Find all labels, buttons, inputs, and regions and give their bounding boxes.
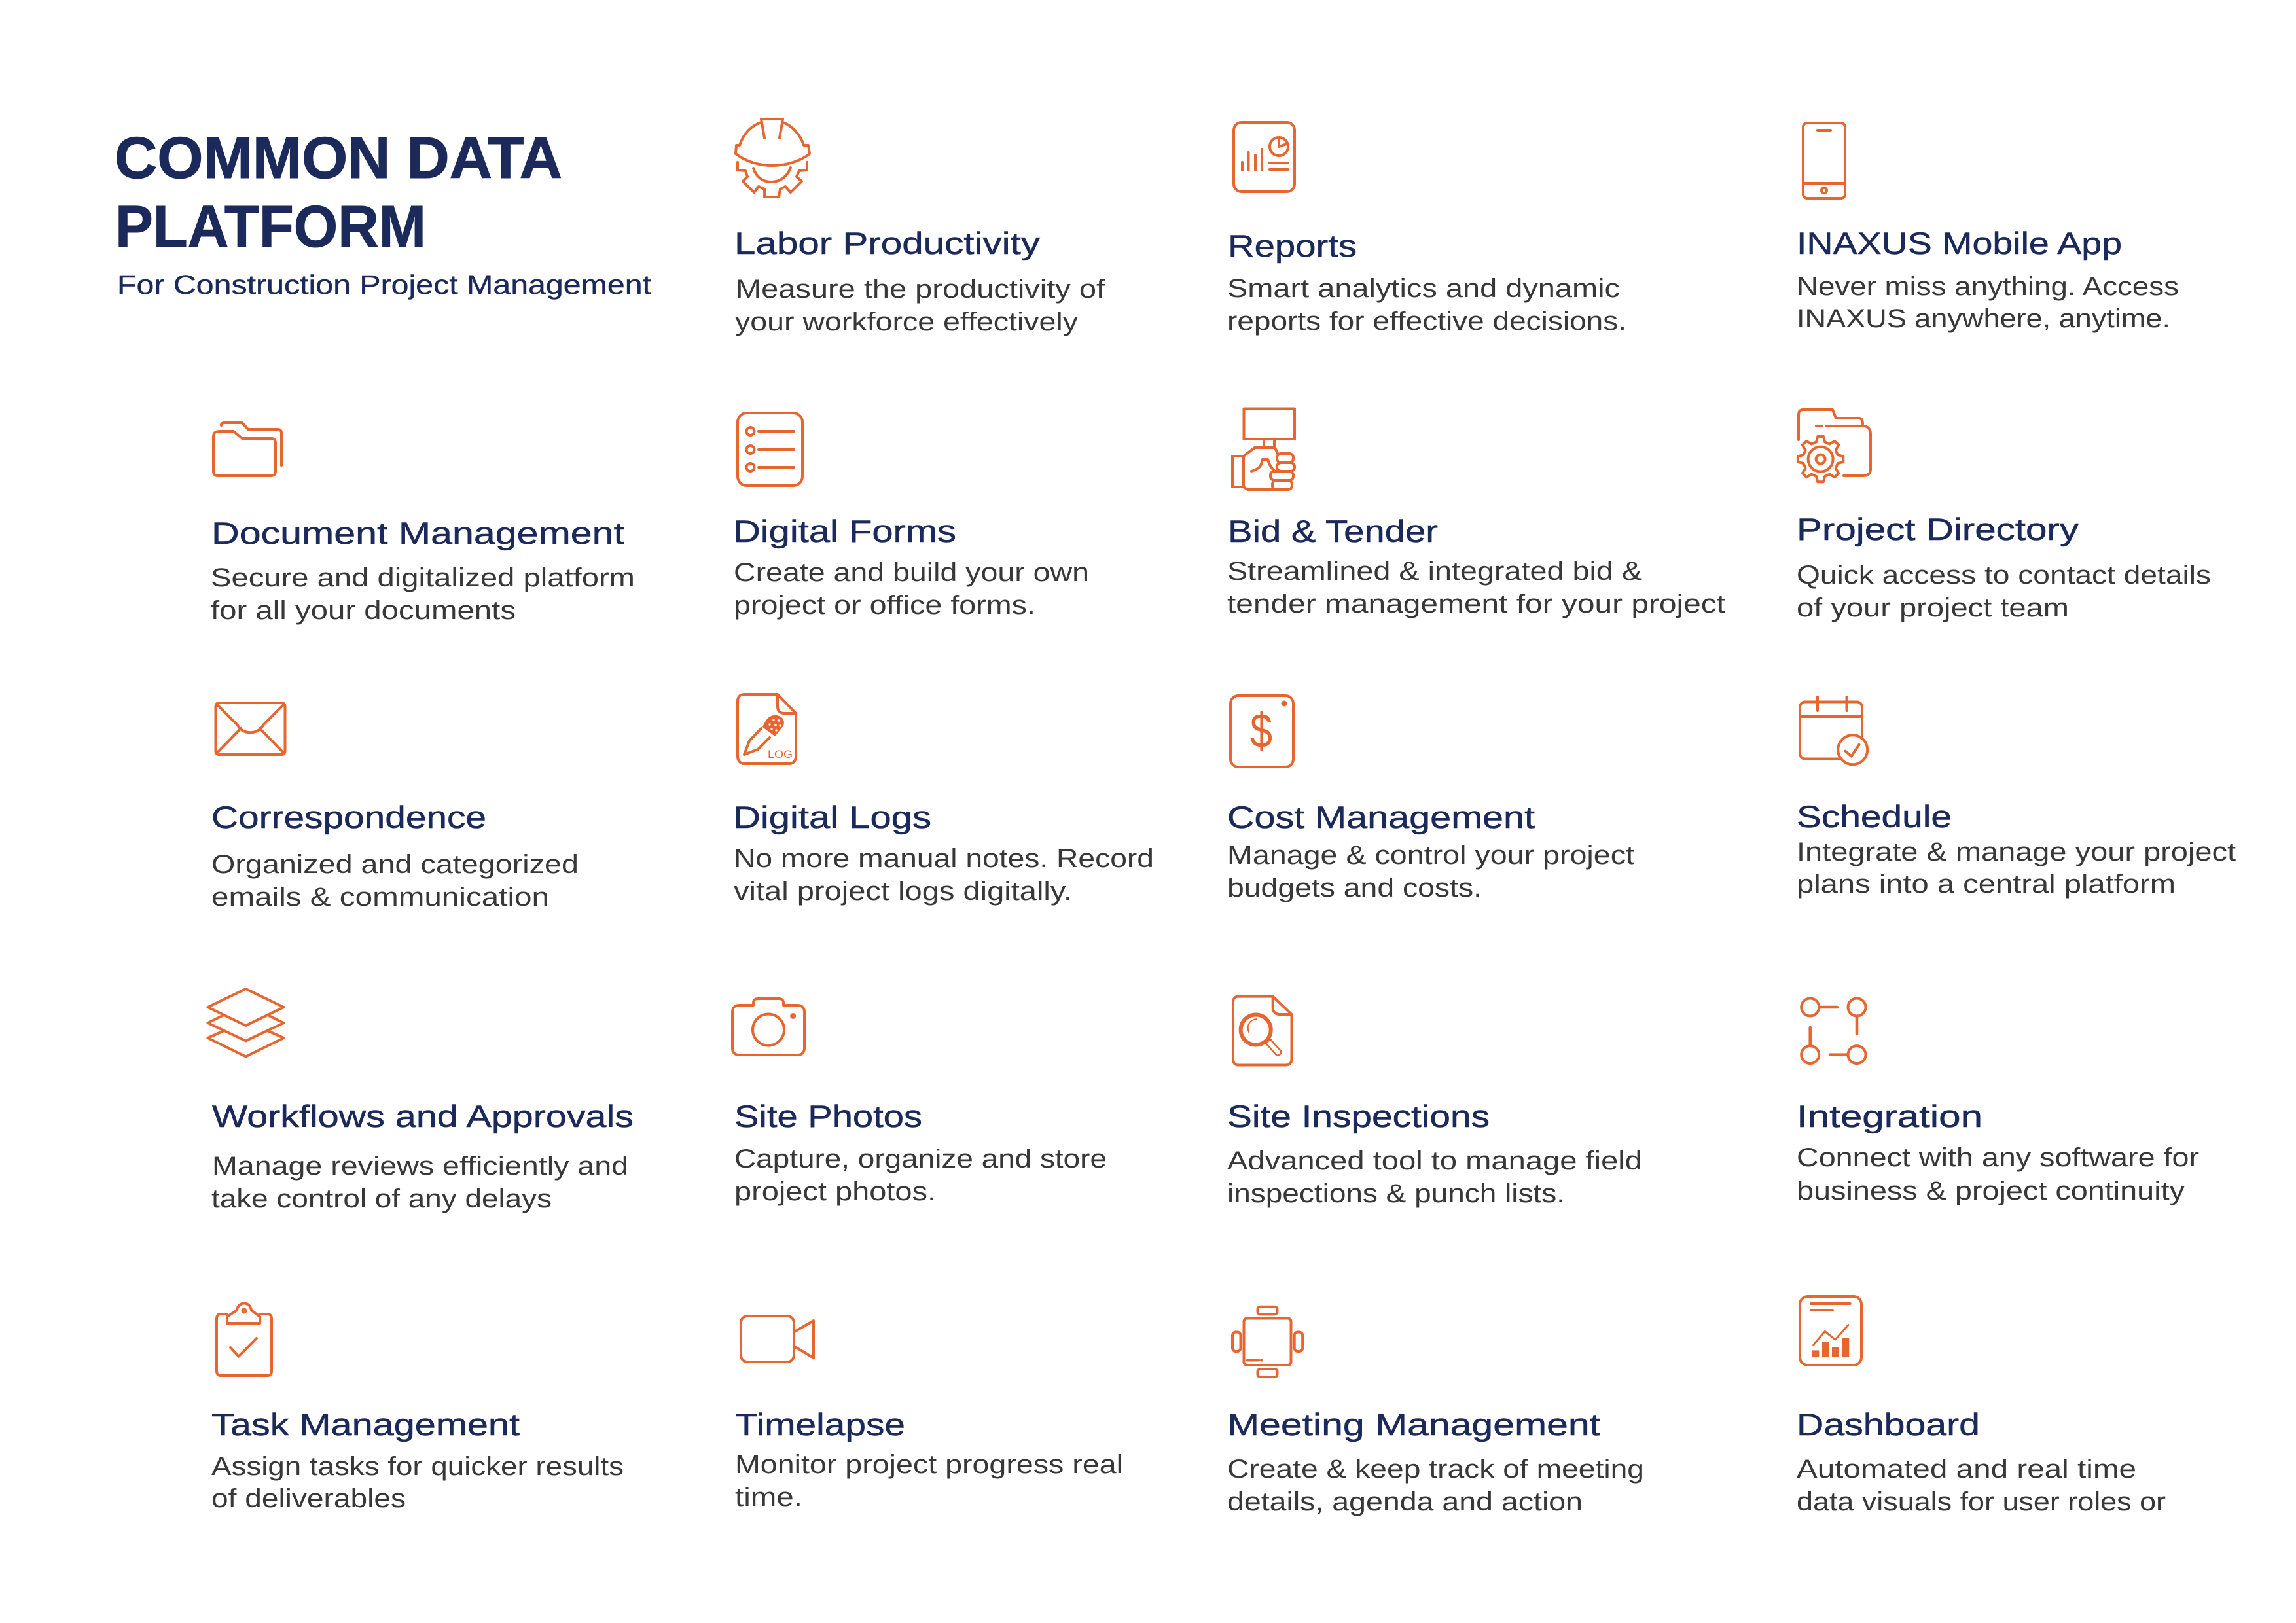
icon: envelope: [216, 703, 285, 755]
panel: reports: [1227, 122, 1626, 336]
panel: timelapse: [735, 1316, 1123, 1512]
panel: digital logs: [733, 694, 1154, 906]
icon: camera: [732, 999, 804, 1055]
description: Advanced tool to manage field: [1227, 1147, 1642, 1175]
description: [1797, 272, 2179, 333]
description: [1797, 1455, 2166, 1516]
description: Integrate & manage your project: [1797, 838, 2236, 866]
description: Connect with any software for: [1797, 1143, 2199, 1172]
icon: mobile phone: [1803, 123, 1845, 198]
description: [211, 563, 635, 625]
description: [734, 1145, 1107, 1206]
icon: form list: [738, 413, 802, 486]
panel: workflows and approvals: [208, 989, 634, 1213]
description: project or office forms.: [734, 591, 1035, 620]
icon: report card: [1234, 122, 1295, 192]
icon: hand holding sign: [1232, 408, 1295, 490]
panel: meeting management: [1227, 1307, 1644, 1516]
description: Never miss anything. Access: [1797, 272, 2179, 301]
description: reports for effective decisions.: [1227, 307, 1626, 336]
heading: Site Photos: [734, 1099, 922, 1133]
heading: Schedule: [1797, 799, 1952, 834]
description: tender management for your project: [1227, 590, 1725, 618]
heading: Workflows and Approvals: [212, 1099, 634, 1133]
description: Smart analytics and dynamic: [1227, 274, 1620, 303]
panel: bid and tender: [1227, 408, 1725, 618]
icon: dashboard chart: [1800, 1296, 1861, 1365]
panel: labor productivity: [734, 119, 1105, 336]
icon: video camera: [741, 1316, 814, 1362]
description: [1797, 838, 2236, 899]
description: time.: [735, 1483, 802, 1512]
icon: dollar card: $: [1250, 704, 1272, 758]
description: Assign tasks for quicker results: [211, 1452, 624, 1481]
heading: Task Management: [211, 1407, 520, 1442]
description: project photos.: [734, 1177, 936, 1206]
description: [1227, 274, 1626, 336]
heading: Site Inspections: [1227, 1099, 1490, 1133]
heading: Digital Forms: [733, 514, 956, 548]
description: [734, 844, 1154, 906]
description: [735, 1450, 1123, 1512]
icon: helmet and gear: [736, 119, 810, 197]
heading: Correspondence: [211, 800, 486, 834]
description: [1797, 1143, 2199, 1205]
description: Automated and real time: [1797, 1455, 2136, 1484]
description: Create & keep track of meeting: [1227, 1455, 1644, 1484]
heading: Dashboard: [1797, 1407, 1980, 1442]
description: [735, 275, 1105, 336]
description: your workforce effectively: [735, 308, 1078, 336]
icon: stacked layers: [208, 989, 284, 1056]
description: Manage & control your project: [1227, 841, 1634, 870]
description: Organized and categorized: [211, 850, 579, 879]
panel: document management: [211, 423, 635, 625]
description: Create and build your own: [734, 558, 1089, 587]
heading: Document Management: [211, 516, 624, 550]
panel: task management: [211, 1304, 624, 1513]
panel: schedule: [1797, 697, 2236, 899]
description: [1227, 557, 1725, 618]
header block: [115, 126, 652, 300]
icon: document with magnifier: [1233, 997, 1292, 1065]
description: [734, 558, 1089, 620]
description: Manage reviews efficiently and: [212, 1152, 628, 1181]
description: Quick access to contact details: [1797, 561, 2211, 590]
description: Capture, organize and store: [734, 1145, 1107, 1173]
icon: log document with pen: [738, 694, 796, 764]
description: No more manual notes. Record: [734, 844, 1154, 873]
heading: INAXUS Mobile App: [1797, 226, 2122, 260]
heading: Labor Productivity: [734, 226, 1041, 260]
icon: meeting table: [1232, 1307, 1302, 1377]
heading: Timelapse: [735, 1407, 905, 1442]
description: [211, 1452, 624, 1513]
description: of your project team: [1797, 594, 2069, 622]
icon: calendar with check: [1800, 697, 1867, 764]
description: [1227, 1147, 1642, 1208]
panel: site inspections: [1227, 997, 1642, 1208]
heading: Project Directory: [1797, 512, 2079, 546]
description: data visuals for user roles or: [1797, 1488, 2166, 1516]
description: for all your documents: [211, 596, 516, 625]
panel: integration: [1797, 999, 2199, 1205]
description: [211, 850, 579, 912]
heading: Cost Management: [1227, 800, 1535, 834]
description: [211, 1152, 628, 1213]
panel: project directory: [1797, 410, 2211, 622]
description: Monitor project progress real: [735, 1450, 1123, 1479]
description: take control of any delays: [211, 1185, 552, 1213]
description: [1797, 561, 2211, 622]
description: inspections & punch lists.: [1227, 1179, 1565, 1208]
description: [1227, 1455, 1644, 1516]
icon: dollar card: [1230, 696, 1293, 767]
description: [1227, 841, 1634, 902]
icon: folders: [213, 423, 281, 476]
heading: Reports: [1228, 228, 1357, 263]
panel: inaxus mobile app: [1797, 123, 2179, 333]
panel: site photos: [732, 999, 1107, 1206]
title line 1: COMMON DATA: [115, 126, 562, 191]
icon: connected nodes: [1801, 999, 1865, 1063]
description: Measure the productivity of: [736, 275, 1105, 304]
panel: correspondence: [211, 703, 579, 912]
description: emails & communication: [211, 883, 549, 912]
panel: digital forms: [733, 413, 1089, 620]
heading: Integration: [1797, 1099, 1982, 1133]
heading: Bid & Tender: [1228, 514, 1438, 548]
icon: folder with gear: [1798, 410, 1871, 482]
description: details, agenda and action: [1227, 1488, 1583, 1516]
description: Streamlined & integrated bid &: [1227, 557, 1642, 586]
panel: dashboard: [1797, 1296, 2166, 1516]
description: vital project logs digitally.: [734, 877, 1072, 906]
panel: cost management: [1227, 696, 1634, 902]
description: business & project continuity: [1797, 1177, 2185, 1205]
description: of deliverables: [211, 1484, 406, 1513]
description: plans into a central platform: [1797, 870, 2176, 899]
title line 2: PLATFORM: [115, 194, 426, 260]
description: INAXUS anywhere, anytime.: [1797, 304, 2170, 333]
description: Secure and digitalized platform: [211, 563, 635, 592]
icon: clipboard with check: [217, 1304, 272, 1376]
subtitle: For Construction Project Management: [117, 270, 652, 300]
icon: log document with pen: LOG: [768, 748, 793, 760]
heading: Digital Logs: [733, 800, 931, 834]
heading: Meeting Management: [1227, 1407, 1600, 1442]
description: budgets and costs.: [1227, 874, 1482, 902]
